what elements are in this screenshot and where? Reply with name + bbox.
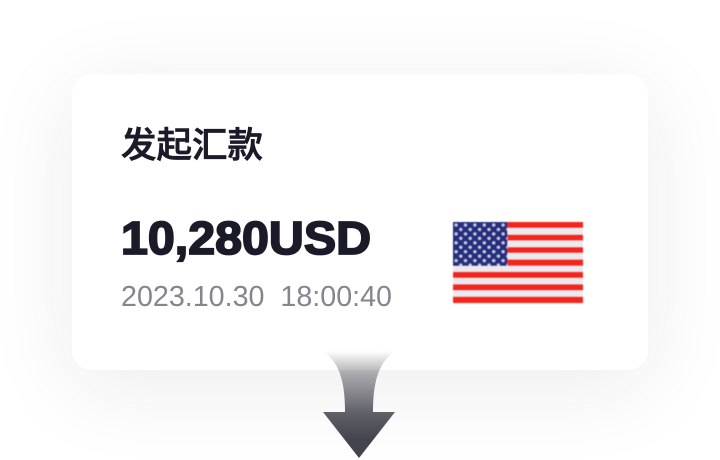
- amount: 10,280USD: [121, 212, 371, 264]
- date and time: 2023.10.30 18:00:40: [121, 281, 392, 313]
- icon: US flag: [453, 222, 583, 303]
- arrow pointing down: [323, 351, 395, 458]
- heading: 发起汇款: [121, 125, 263, 165]
- panel: remittance card: [72, 74, 648, 370]
